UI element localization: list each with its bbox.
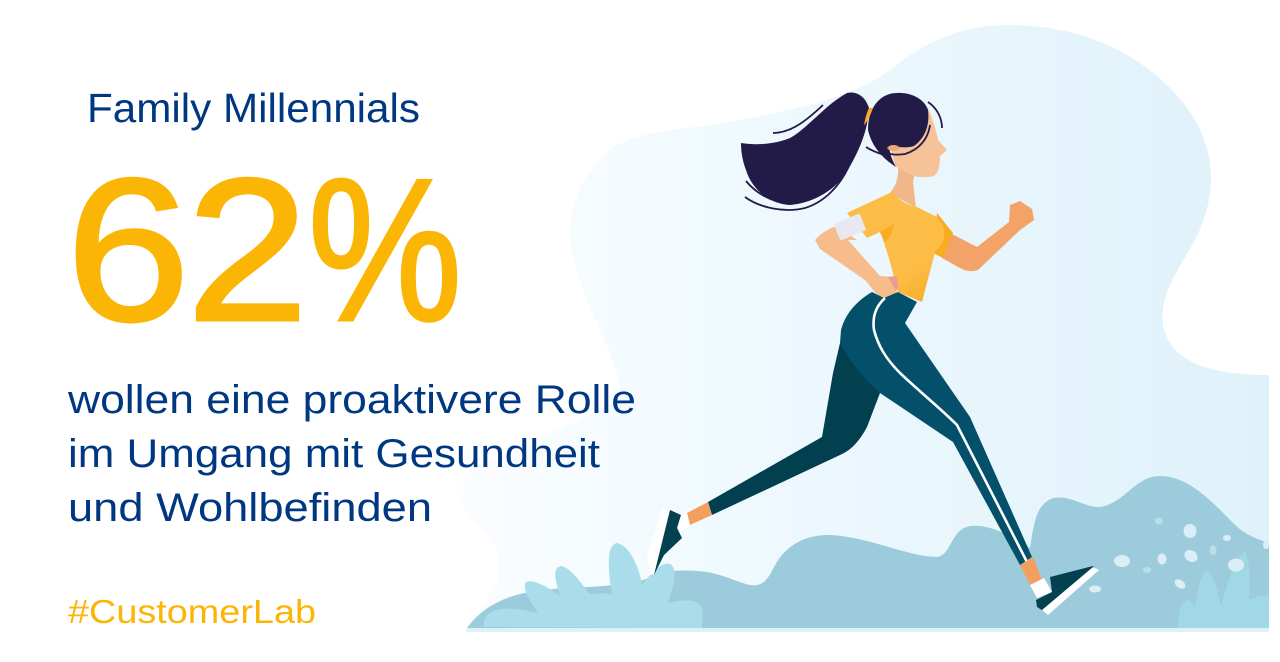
body text: wollen eine proaktivere Rolle — [67, 378, 636, 422]
neck — [890, 163, 916, 208]
front ankle — [1020, 557, 1042, 585]
hair tie — [864, 108, 873, 125]
hair strands — [745, 105, 848, 210]
right arm — [942, 201, 1034, 271]
front leg — [840, 292, 1032, 565]
background blob — [455, 25, 1269, 632]
leg stripe — [873, 298, 1027, 562]
big number 62%: 6 — [66, 137, 190, 364]
face — [885, 108, 947, 177]
hip shade — [888, 276, 899, 291]
front shoe sole — [1042, 567, 1099, 615]
back sock — [677, 513, 690, 532]
shirt armpit shade — [880, 224, 894, 242]
bush right — [1178, 552, 1269, 628]
ground line — [466, 628, 1269, 632]
big number 62% — [66, 137, 462, 364]
hair — [868, 93, 928, 167]
body text: und Wohlbefinden — [68, 486, 432, 530]
big number 62%: 2 — [186, 137, 308, 364]
back shoe sole — [647, 508, 669, 575]
body text — [67, 378, 636, 530]
hashtag: #CustomerLab — [68, 593, 316, 630]
back shoe — [654, 510, 682, 575]
front shoe — [1036, 566, 1096, 612]
fringe strand — [866, 102, 942, 155]
title: Family Millennials: Family Millennials — [87, 85, 420, 131]
bush left — [484, 543, 703, 628]
armband — [834, 213, 866, 241]
ponytail — [741, 93, 869, 205]
sleeve shade — [933, 213, 953, 258]
back leg — [708, 343, 880, 515]
dust particles — [1089, 518, 1269, 592]
front sock — [1030, 578, 1052, 598]
ear — [887, 145, 900, 151]
body text: im Umgang mit Gesundheit — [68, 432, 600, 476]
back ankle — [687, 502, 712, 525]
shirt — [847, 192, 944, 302]
left arm — [815, 226, 899, 299]
runner figure — [647, 93, 1099, 615]
ground hills — [467, 476, 1269, 628]
big number 62%: % — [308, 137, 462, 364]
